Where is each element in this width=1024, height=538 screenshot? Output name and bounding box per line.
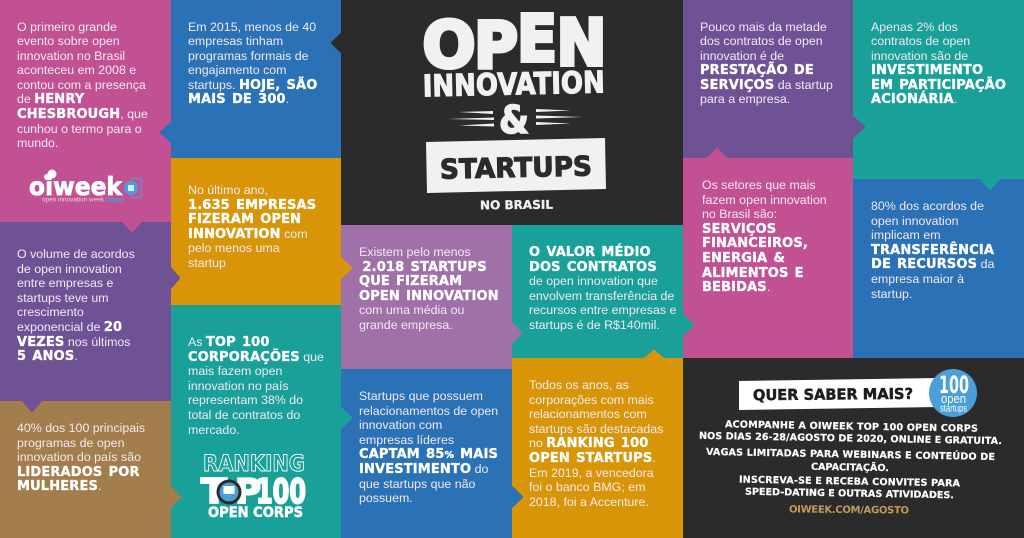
text: services: [700, 20, 833, 106]
panel: top 100 teal: [171, 305, 341, 538]
text: investment: CAPTAM 85% MAIS: [359, 447, 498, 462]
text: transfer: 80% dos acordos de: [871, 199, 984, 213]
panel: investment blue: [341, 369, 512, 538]
text: 1635 companies: startup: [188, 256, 226, 270]
text: top 100 corporations: mercado.: [188, 423, 240, 437]
text: services: Pouco mais da metade: [700, 20, 827, 34]
text: ranking: 2018, foi a Accenture.: [529, 495, 649, 509]
text: investment: possuem.: [359, 491, 413, 505]
text: equity: innovation são de: [871, 49, 968, 63]
text: services: dos contratos de open: [700, 34, 823, 48]
panel: equity teal: [853, 0, 1024, 179]
text: 2015 programs: [188, 20, 317, 107]
text: 2018 startups: grande empresa.: [359, 318, 453, 332]
text: sectors: Os setores que mais: [702, 178, 816, 192]
text: average value: [529, 243, 676, 332]
text: top 100 corporations: total de contratos do: [188, 408, 300, 422]
text: call to action details: [699, 419, 1002, 501]
startups label text: STARTUPS: [440, 151, 592, 186]
panel: ranking orange: [512, 358, 683, 538]
panel: 2015 blue: [171, 0, 341, 158]
banner: quer saber mais: QUER SABER MAIS?: [753, 385, 913, 404]
text: women leaders: LIDERADOS POR: [17, 465, 140, 480]
text: growth: exponencial de 20: [17, 320, 122, 335]
panel: women brown: [0, 401, 171, 538]
text: call to action details: ACOMPANHE A OIWEEK TOP 100 OPEN CORPS: [725, 419, 978, 435]
text: 1635 companies: [188, 183, 316, 270]
panel: call to action dark: [683, 358, 1024, 538]
text: equity: [870, 20, 1006, 107]
badge: 100 open startups: [929, 369, 977, 417]
text: transfer: empresa maior à: [871, 272, 964, 286]
text: ranking: no RANKING 100: [529, 436, 648, 451]
panel: title dark: [341, 0, 683, 225]
text: growth: entre empresas e: [17, 276, 113, 290]
text: investment: Startups que possuem: [359, 389, 483, 403]
text: average value: DOS CONTRATOS: [529, 260, 657, 275]
text: equity: EM PARTICIPAÇÃO: [871, 78, 1006, 93]
text: first event: aconteceu em 2008 e: [17, 63, 136, 77]
title word: INNOVATION: INNOVATION: [422, 65, 605, 104]
text: sectors: no Brasil são:: [702, 207, 777, 221]
text: equity: ACIONÁRIA.: [871, 92, 957, 107]
title ampersand: &: [499, 98, 529, 142]
text: women leaders: 40% dos 100 principais: [17, 421, 145, 435]
text: first event: cunhou o termo para o: [17, 122, 142, 136]
text: growth: crescimento: [17, 305, 84, 319]
panel: average value teal: [512, 225, 683, 358]
panel: growth purple: [0, 222, 171, 401]
text: growth: 5 ANOS.: [17, 349, 78, 364]
link: oiweek.com/agosto: OIWEEK.COM/AGOSTO: [789, 504, 909, 516]
text: services: para a empresa.: [700, 92, 790, 106]
text: services: SERVIÇOS da startup: [700, 78, 833, 93]
text: 1635 companies: FIZERAM OPEN: [188, 212, 301, 227]
panel: first event pink: [0, 0, 171, 222]
text: 2015 programs: programas formais de: [188, 49, 309, 63]
text: 2018 startups: 2.018 STARTUPS: [362, 260, 487, 275]
text: first event: O primeiro grande: [17, 20, 117, 34]
text: 2018 startups: Existem pelo menos: [359, 245, 471, 259]
text: equity: Apenas 2% dos: [871, 20, 958, 34]
title word: OPEN: E: [517, 3, 557, 77]
text: transfer: open innovation: [871, 214, 958, 228]
text: women leaders: [17, 421, 145, 494]
logo: oiweek: oiweek: [29, 172, 123, 201]
text: 2015 programs: Em 2015, menos de 40: [188, 20, 316, 34]
text: transfer: startup.: [871, 287, 912, 301]
text: average value: recursos entre empresas e: [529, 303, 676, 317]
text: 2015 programs: MAIS DE 300.: [188, 92, 289, 107]
text: sectors: ALIMENTOS E: [702, 266, 804, 281]
text: first event: evento sobre open: [17, 34, 120, 48]
text: ranking: foi o banco BMG; em: [529, 480, 645, 494]
logo: oiweek: digital: [105, 198, 124, 204]
text: average value: startups é de R$140mil.: [529, 318, 660, 332]
badge: 100 open startups: startups: [940, 404, 967, 414]
text: average value: envolvem transferência de: [529, 289, 674, 303]
panel: services purple: [683, 0, 853, 158]
speed lines left: [448, 111, 494, 126]
text: ranking: OPEN STARTUPS.: [529, 451, 656, 466]
text: 1635 companies: No último ano,: [188, 183, 268, 197]
text: transfer: DE RECURSOS da: [871, 257, 994, 272]
text: sectors: SERVIÇOS: [702, 222, 776, 237]
panel: transfer blue: [853, 179, 1024, 358]
text: equity: contratos de open: [871, 34, 970, 48]
text: top 100 corporations: representam 38% do: [188, 393, 303, 407]
text: top 100 corporations: [188, 335, 324, 437]
title word: OPEN: [422, 3, 606, 84]
text: first event: CHESBROUGH, que: [17, 107, 148, 122]
text: call to action details: NOS DIAS 26-28/AGOSTO DE 2020, ONLINE E GRATUITA.: [699, 431, 1002, 447]
text: 1635 companies: pelo menos uma: [188, 241, 280, 255]
text: ranking: Todos os anos, as: [529, 378, 629, 392]
logo: oiweek: open innovation week: [42, 198, 105, 204]
text: 2015 programs: engajamento com: [188, 63, 286, 77]
speed lines right: [536, 109, 582, 125]
text: growth: [16, 247, 135, 364]
text: women leaders: innovation do país são: [17, 450, 141, 464]
text: top 100 corporations: CORPORAÇÕES que: [188, 350, 324, 365]
text: first event: de HENRY: [17, 92, 84, 107]
text: 2018 startups: QUE FIZERAM: [359, 274, 462, 289]
text: equity: INVESTIMENTO: [871, 63, 983, 78]
text: 1635 companies: 1.635 EMPRESAS: [188, 198, 316, 213]
text: 2015 programs: empresas tinham: [188, 34, 283, 48]
text: first event: innovation no Brasil: [17, 49, 125, 63]
text: sectors: FINANCEIROS,: [702, 236, 808, 251]
text: ranking: startups são destacadas: [529, 422, 663, 436]
banner: quer saber mais: [739, 378, 938, 410]
text: investment: innovation com: [359, 418, 442, 432]
text: women leaders: programas de open: [17, 436, 124, 450]
text: investment: relacionamentos de open: [359, 404, 498, 418]
title word: OPEN: N: [556, 7, 606, 81]
text: transfer: implicam em: [871, 228, 941, 242]
title word: OPEN: P: [474, 10, 518, 84]
text: call to action details: CAPACITAÇÃO.: [811, 460, 889, 474]
text: services: PRESTAÇÃO DE: [700, 63, 814, 78]
text: growth: startups teve um: [17, 291, 109, 305]
text: ranking: relacionamentos com: [529, 407, 647, 421]
logo: ranking top 100 open corps: 100: [256, 472, 306, 512]
no brasil: NO BRASIL: [480, 198, 553, 212]
text: growth: O volume de acordos: [17, 247, 135, 261]
text: sectors: ENERGIA &: [702, 251, 785, 266]
text: investment: que startups que não: [359, 477, 475, 491]
text: transfer: [870, 199, 994, 301]
text: first event: contou com a presença: [17, 78, 146, 92]
text: investment: INVESTIMENTO do: [359, 462, 488, 477]
text: sectors: BEBIDAS.: [702, 280, 770, 295]
text: average value: de open innovation que: [529, 274, 658, 288]
text: ranking: corporações com mais: [529, 393, 654, 407]
text: ranking: [529, 378, 663, 509]
text: 2018 startups: com uma média ou: [359, 303, 464, 317]
text: investment: [359, 389, 498, 505]
text: first event: [17, 20, 148, 150]
text: sectors: fazem open innovation: [702, 193, 827, 207]
text: women leaders: MULHERES.: [17, 479, 101, 494]
logo: ranking top 100 open corps: RANKING: [203, 452, 305, 477]
logo: ranking top 100 open corps: T: [201, 472, 228, 512]
text: transfer: TRANSFERÊNCIA: [871, 243, 994, 258]
text: 2015 programs: startups. HOJE, SÃO: [188, 78, 317, 93]
panel: 1635 companies orange: [171, 158, 341, 305]
text: top 100 corporations: innovation no país: [188, 379, 289, 393]
logo: ranking top 100 open corps: OPEN CORPS: [208, 505, 303, 521]
startups label box: [426, 138, 606, 193]
badge: 100 open startups: open: [941, 391, 966, 406]
text: sectors: [702, 178, 827, 295]
text: 2018 startups: [359, 245, 499, 332]
text: first event: mundo.: [17, 136, 58, 150]
text: call to action details: SPEED-DATING E OUTRAS ATIVIDADES.: [745, 487, 954, 501]
text: 2018 startups: OPEN INNOVATION: [359, 289, 499, 304]
text: average value: O VALOR MÉDIO: [529, 245, 651, 260]
title word: OPEN: O: [422, 9, 476, 83]
text: services: innovation é de: [700, 49, 784, 63]
text: top 100 corporations: mais fazem open: [188, 364, 282, 378]
text: investment: empresas líderes: [359, 433, 454, 447]
logo: ranking top 100 open corps: P: [235, 472, 261, 512]
text: 1635 companies: INNOVATION com: [188, 227, 308, 242]
text: ranking: Em 2019, a vencedora: [529, 466, 654, 480]
panel: 2018 startups lilac: [341, 225, 512, 369]
text: growth: VEZES nos últimos: [17, 335, 130, 350]
text: top 100 corporations: As TOP 100: [188, 335, 270, 350]
text: call to action details: INSCREVA-SE E RECEBA CONVITES PARA: [739, 475, 961, 489]
text: call to action details: VAGAS LIMITADAS PARA WEBINARS E CONTEÚDO DE: [706, 445, 995, 463]
badge: 100 open startups: 100: [939, 371, 969, 399]
text: growth: de open innovation: [17, 262, 122, 276]
panel: sectors pink: [683, 158, 853, 358]
